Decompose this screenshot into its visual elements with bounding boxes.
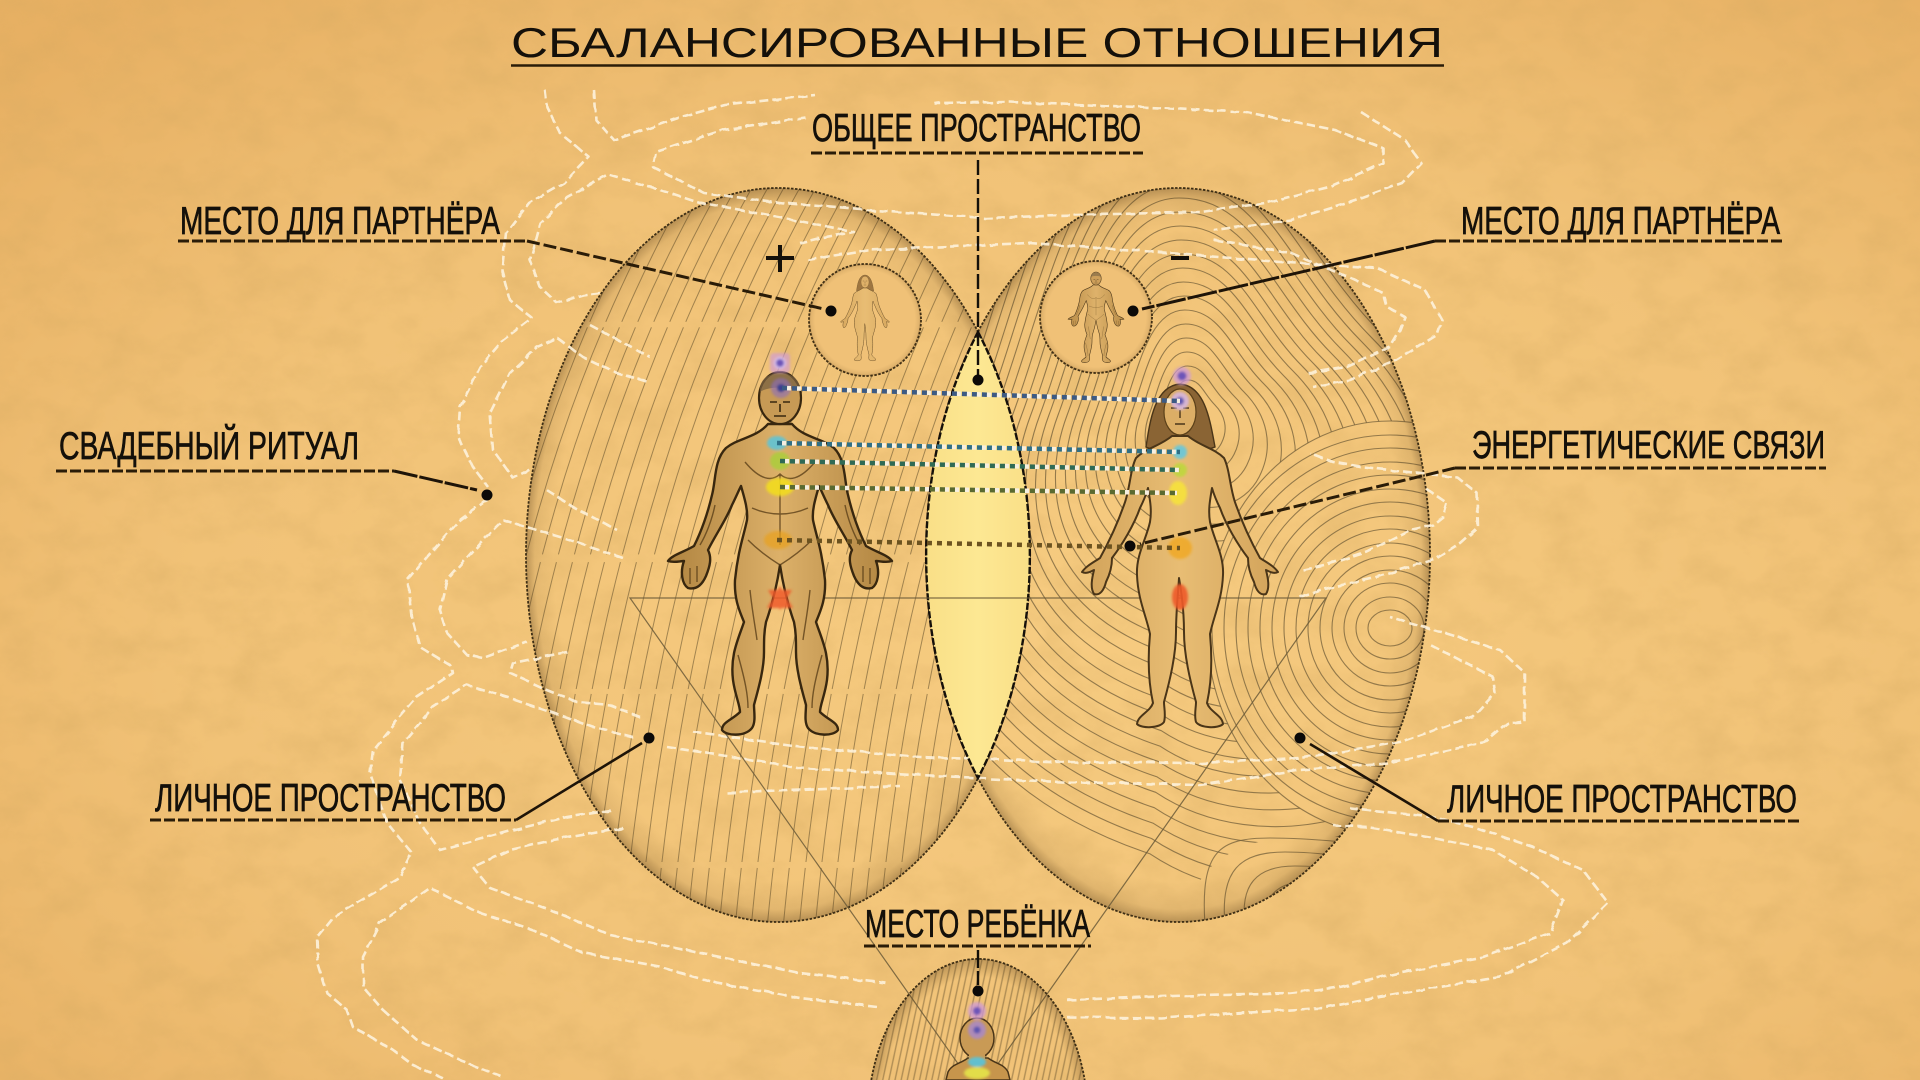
callout: shared space xyxy=(811,107,1143,386)
partner circle: left xyxy=(809,264,921,376)
callout: energy connections xyxy=(1124,424,1826,552)
callout: shared space: ОБЩЕЕ ПРОСТРАНСТВО xyxy=(812,107,1141,150)
triangle linking the partners to the child xyxy=(630,598,1326,1080)
callout: partner's place, right: МЕСТО ДЛЯ ПАРТНЁРА xyxy=(1461,200,1780,243)
contour lines xyxy=(926,190,1430,920)
female figure xyxy=(1082,384,1278,727)
chakras: woman xyxy=(1168,367,1192,610)
minus sign xyxy=(1171,256,1189,260)
shared space: central vesica xyxy=(926,332,1030,778)
callout: partner's place, left xyxy=(178,200,836,316)
callout: personal space, right xyxy=(1294,732,1800,821)
left personal oval with diagonal hatching xyxy=(525,187,1031,923)
small woman figure xyxy=(840,275,890,361)
small man figure xyxy=(1068,272,1124,363)
callout: child's place: МЕСТО РЕБЁНКА xyxy=(865,903,1090,946)
callout: personal space, left: ЛИЧНОЕ ПРОСТРАНСТВО xyxy=(155,777,506,820)
callout: partner's place, right xyxy=(1128,200,1782,316)
wedding ritual: white dashed ropes xyxy=(317,90,1608,1078)
partner circle: right xyxy=(1040,261,1152,373)
callout: wedding ritual: СВАДЕБНЫЙ РИТУАЛ xyxy=(59,423,359,468)
right personal oval with contour lines xyxy=(925,187,1431,923)
chakras: child xyxy=(964,1002,990,1079)
callout: wedding ritual xyxy=(56,423,492,500)
callout: child's place xyxy=(864,903,1091,996)
male figure xyxy=(668,372,892,735)
energy connections between chakras xyxy=(777,388,1180,548)
hatching lines xyxy=(526,188,977,922)
chakras: man xyxy=(764,353,794,610)
title: СБАЛАНСИРОВАННЫЕ ОТНОШЕНИЯ xyxy=(511,19,1443,66)
callout: partner's place, left: МЕСТО ДЛЯ ПАРТНЁРА xyxy=(180,200,500,243)
callout: personal space, left xyxy=(150,732,654,820)
plus sign xyxy=(766,245,794,272)
child figure xyxy=(946,1018,1010,1080)
child's oval xyxy=(871,959,1085,1080)
